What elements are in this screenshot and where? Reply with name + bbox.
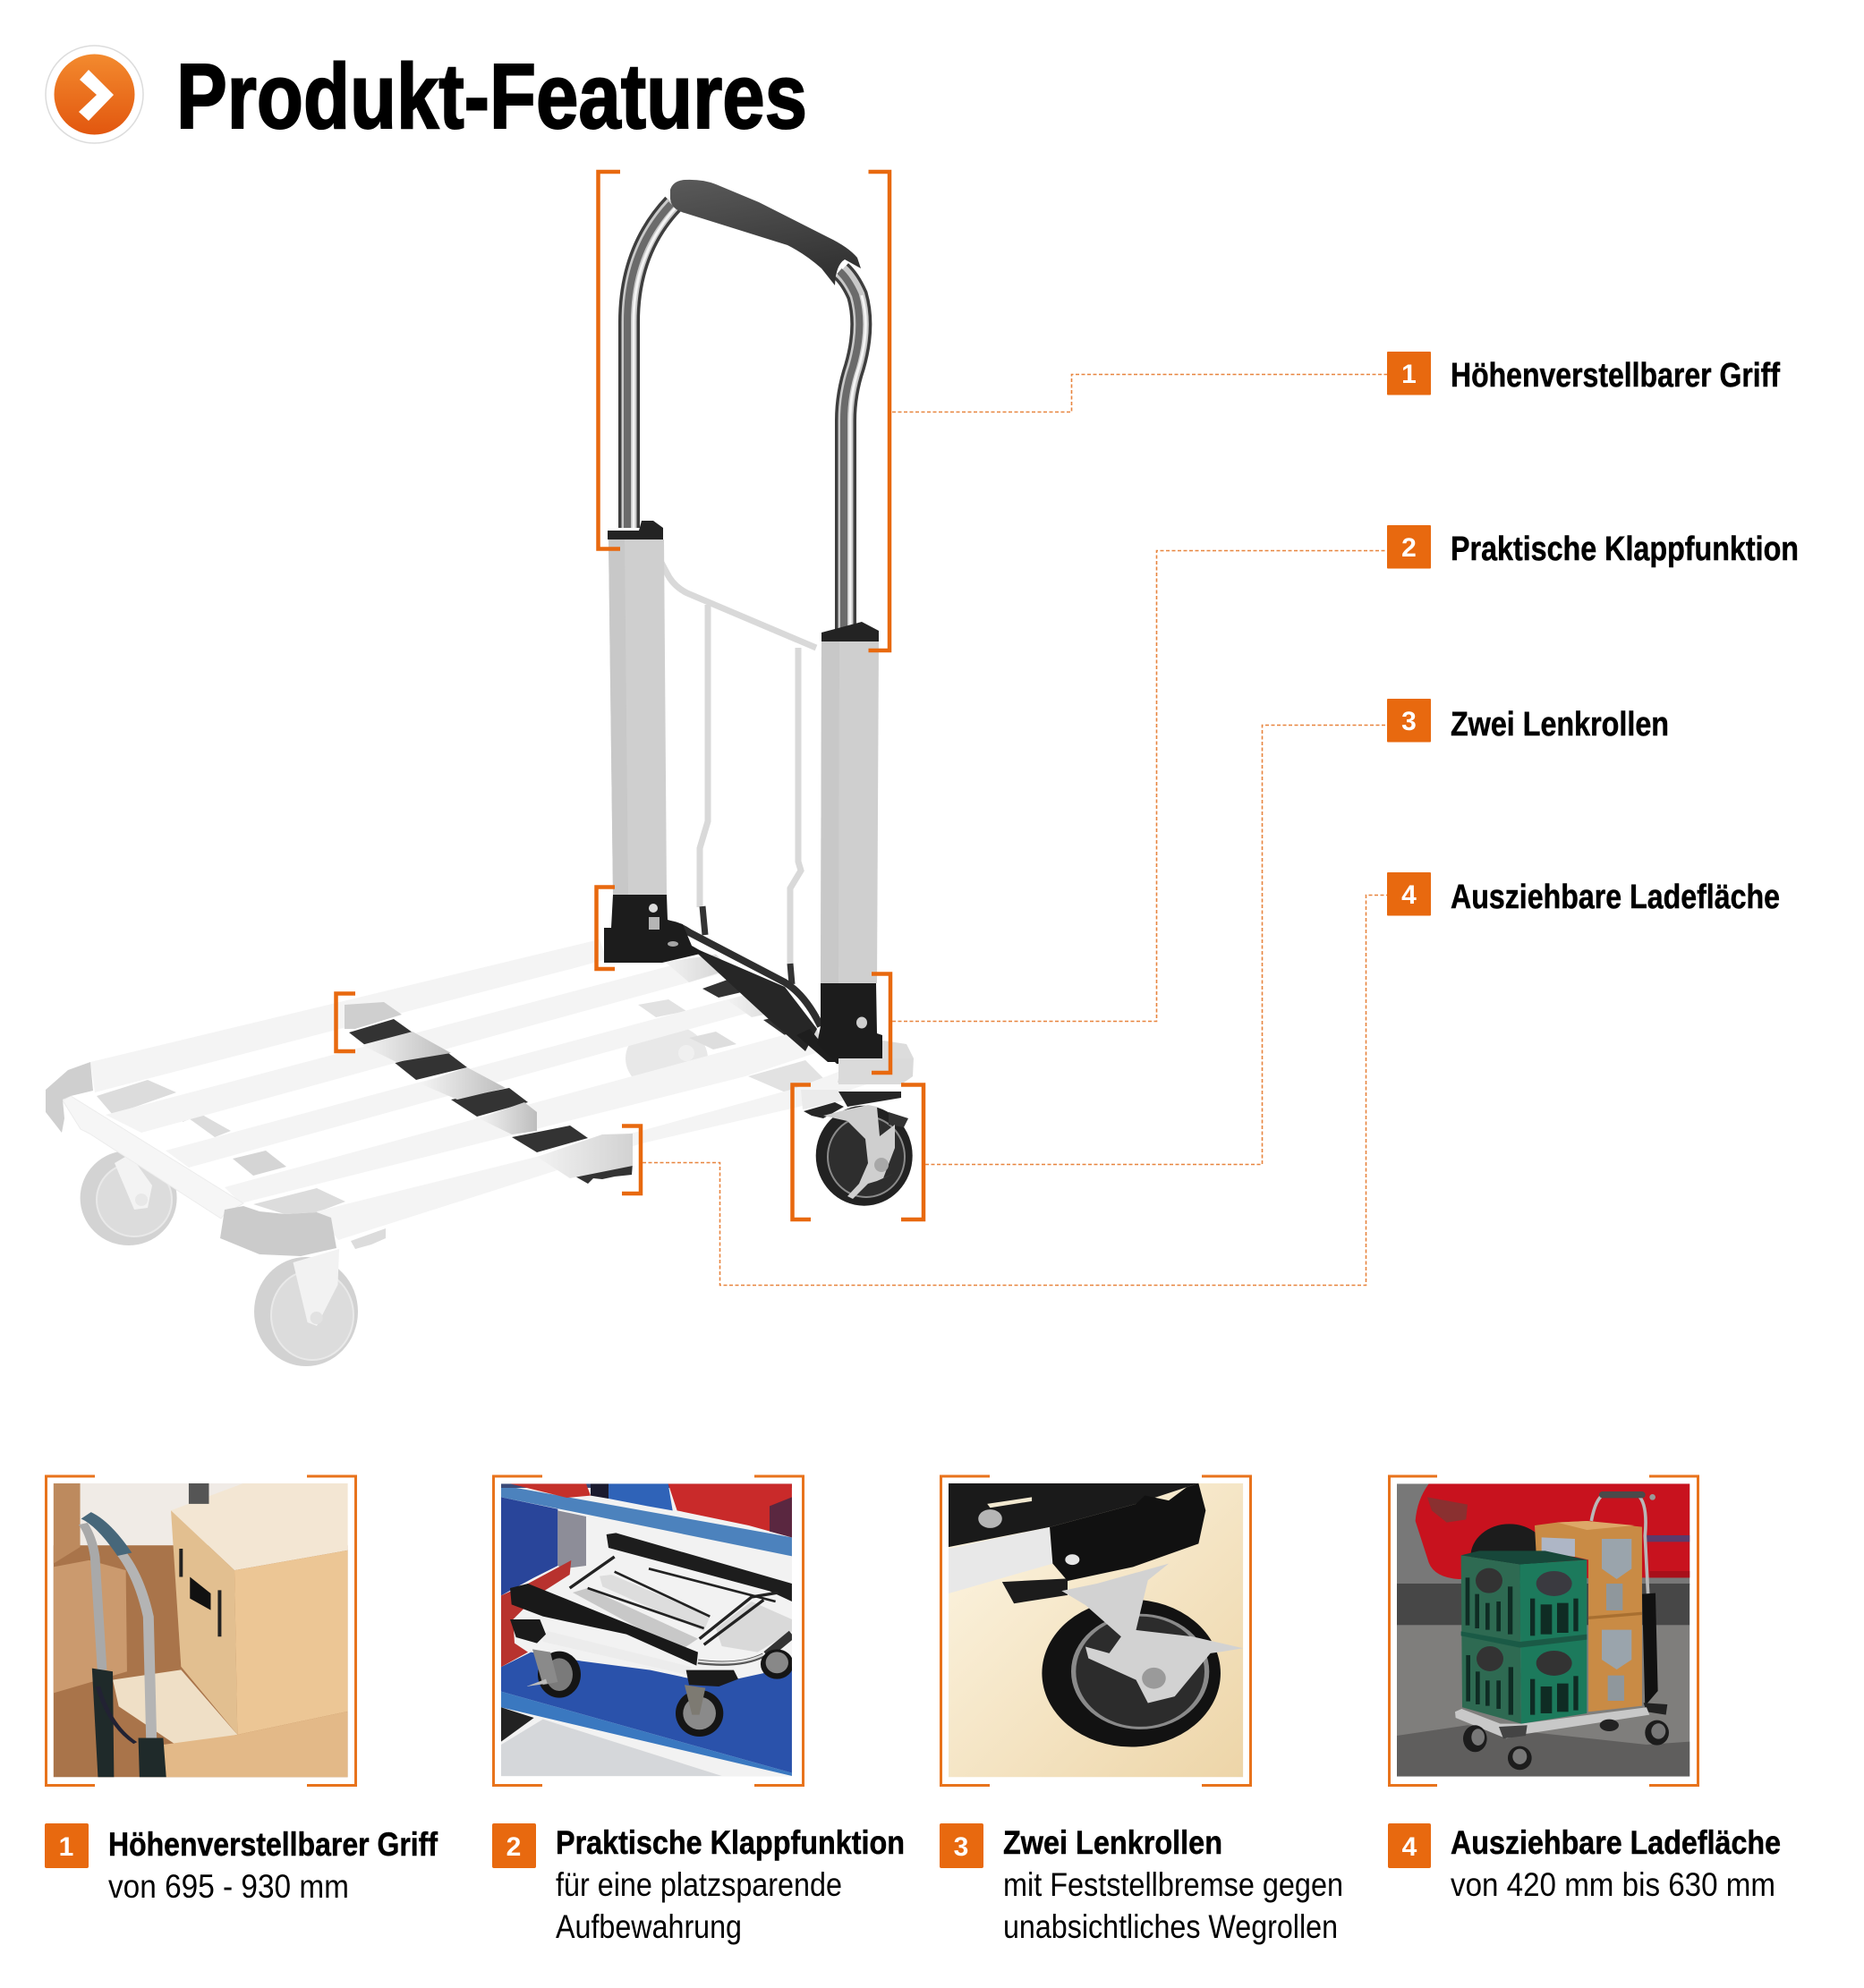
header: [46, 45, 807, 148]
line 4: [643, 895, 1387, 1285]
right chrome tube: [839, 271, 865, 631]
panel: photo 3 castor: [941, 1476, 1251, 1786]
frame: [494, 1476, 804, 1786]
front wheel: [254, 1228, 386, 1366]
telescopic columns: [608, 521, 879, 983]
black hinge assembly: [604, 895, 882, 1064]
highlight brackets: [336, 172, 923, 1219]
legend item 4: 4: [1401, 880, 1417, 910]
caption 1: [45, 1823, 438, 1905]
line 1: [892, 374, 1387, 412]
legend item 1: [1387, 352, 1780, 395]
legend item 1: 1: [1401, 360, 1417, 389]
frame: [1389, 1476, 1698, 1786]
legend item 2: Praktische Klappfunktion: [1451, 531, 1799, 568]
leader lines: [643, 374, 1387, 1285]
icon: orange chevron badge: [46, 46, 143, 143]
legend item 3: [1387, 699, 1669, 743]
photo: trolley loaded with crates: [1397, 1483, 1690, 1777]
caption 2: 2: [506, 1832, 521, 1862]
caption 2: [492, 1823, 905, 1945]
handle: [627, 180, 865, 631]
faded platform: [46, 939, 914, 1366]
line 3: [925, 725, 1387, 1165]
caption 3: unabsichtliches Wegrollen: [1003, 1908, 1338, 1945]
photo: castor close-up: [949, 1483, 1243, 1777]
rear wheel left: [81, 1151, 177, 1245]
right column: [821, 641, 879, 983]
rail 5: [317, 1047, 913, 1240]
plank end with teeth: [537, 1134, 633, 1184]
caption 4: Ausziehbare Ladefläche: [1451, 1824, 1781, 1861]
rail 2: [106, 954, 731, 1133]
active castor: [801, 1058, 913, 1206]
bracket: hinge: [596, 888, 890, 1073]
left column: [609, 539, 667, 895]
rail 4: [225, 1026, 821, 1203]
panel: photo 1 handle: [47, 1476, 356, 1786]
right foot: [817, 983, 882, 1064]
legend item 4: [1387, 872, 1780, 916]
caption 1: von 695 - 930 mm: [108, 1868, 349, 1905]
caption 1: Höhenverstellbarer Griff: [108, 1826, 438, 1863]
title: Produkt-Features: [176, 45, 807, 148]
caption 2: für eine platzsparende: [556, 1866, 842, 1903]
caption 4: [1388, 1823, 1781, 1903]
line 2: [892, 551, 1387, 1022]
frame: [47, 1476, 356, 1786]
sliding plank crossings: [345, 955, 821, 1134]
rail 3: [166, 987, 787, 1168]
folding wire: [653, 548, 816, 964]
bracket: castor: [793, 1084, 923, 1219]
grip: [670, 180, 861, 285]
left foot: [604, 895, 704, 963]
caption 3: 3: [954, 1832, 968, 1862]
legend item 3: Zwei Lenkrollen: [1451, 706, 1669, 743]
feature legend: [1387, 352, 1799, 916]
caption 3: Zwei Lenkrollen: [1003, 1824, 1222, 1861]
rail 1: [90, 939, 607, 1092]
frame: [941, 1476, 1251, 1786]
background castor and beams: [97, 999, 828, 1214]
caption 3: [940, 1823, 1343, 1945]
photo: folded trolley on blue shelf: [501, 1483, 794, 1777]
caption 1: 1: [59, 1832, 73, 1862]
legend item 1: Höhenverstellbarer Griff: [1451, 357, 1780, 395]
photo: boxes and trolley handle: [54, 1483, 348, 1777]
front cross bar: [63, 1096, 243, 1219]
top caps: [608, 521, 663, 539]
panel: photo 4 extendable platform: [1389, 1476, 1698, 1786]
legend item 4: Ausziehbare Ladefläche: [1451, 879, 1780, 916]
caption 4: 4: [1402, 1832, 1417, 1862]
legend item 3: 3: [1401, 707, 1417, 736]
left chrome tube: [627, 204, 676, 528]
trolley illustration: [46, 180, 914, 1366]
corner cap left: [46, 1062, 93, 1133]
caption 3: mit Feststellbremse gegen: [1003, 1866, 1343, 1903]
caption 2: Praktische Klappfunktion: [556, 1824, 905, 1861]
legend item 2: [1387, 525, 1799, 569]
panel: photo 2 folding: [494, 1476, 804, 1786]
caption 4: von 420 mm bis 630 mm: [1451, 1866, 1775, 1903]
legend item 2: 2: [1401, 533, 1417, 563]
corner cap front: [220, 1206, 336, 1256]
caption 2: Aufbewahrung: [556, 1908, 742, 1945]
bracket: plank: [336, 993, 641, 1194]
bracket: handle: [598, 172, 889, 650]
corner cap right: [838, 1041, 914, 1084]
black rubber segments: [349, 980, 810, 1152]
